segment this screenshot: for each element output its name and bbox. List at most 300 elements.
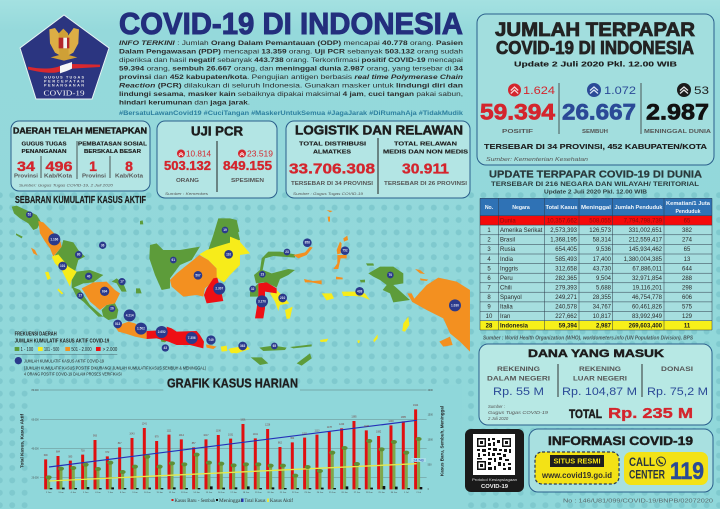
table: negara terpapar: 4 xyxy=(487,257,491,263)
map: case bubbles: 70 xyxy=(389,273,392,277)
left axis: 80.000 xyxy=(32,390,39,392)
map: case bubbles: 23 xyxy=(285,250,289,254)
chart legend: Total Kasus xyxy=(244,499,266,504)
table: negara terpapar: 585,493 xyxy=(555,257,578,263)
panel: uji pcr: ORANG xyxy=(176,178,199,184)
table source: Sumber : World Health Organization (WHO), worldometers.info (UN Population Division), BPS xyxy=(483,336,693,342)
date labels xyxy=(46,492,421,494)
map: case bubbles: 110 xyxy=(226,252,231,256)
panel: dana yang masuk xyxy=(479,344,712,425)
panel: dana yang masuk: REKENING xyxy=(497,367,540,373)
panel: daerah telah menetapkan: 496 xyxy=(46,158,73,174)
table: negara terpapar: Total Kasus xyxy=(546,205,578,211)
table: negara terpapar: Jumlah Penduduk xyxy=(614,205,663,211)
table: negara terpapar: 279,393 xyxy=(555,286,578,292)
map: case bubbles: 27 xyxy=(79,294,82,298)
situs resmi: SITUS RESMI xyxy=(554,458,601,466)
text block: info terkini: INFO TERKINI : Jumlah Orang Dalam Pemantauan (ODP) mencapai 40.778 orang. Pasien xyxy=(119,40,463,47)
bar value labels xyxy=(44,405,419,458)
heading: grafik kasus harian: GRAFIK KASUS HARIAN xyxy=(167,376,298,390)
table: negara terpapar xyxy=(480,198,712,330)
table: negara terpapar: 28 xyxy=(486,324,493,330)
table: negara terpapar: Peru xyxy=(500,276,513,282)
panel: logistik dan relawan xyxy=(286,121,470,198)
bars: meninggal xyxy=(51,486,421,489)
panel: dana yang masuk: TOTAL xyxy=(569,409,602,421)
right axis: 1000 xyxy=(428,440,434,442)
table: negara terpapar: 65 xyxy=(684,218,691,224)
panel: dana yang masuk: Sumber : xyxy=(488,404,505,409)
map: case bubbles: 80 xyxy=(77,253,81,257)
table: negara terpapar: 2,573,393 xyxy=(550,228,578,234)
map: case bubbles: 7.356 xyxy=(188,336,196,340)
table: negara terpapar: Chili xyxy=(500,286,512,292)
table: negara terpapar: 10 xyxy=(486,314,493,320)
logo: Gugus Tugas pentagon xyxy=(20,15,109,99)
table: negara terpapar: 58,314 xyxy=(593,238,612,244)
heading: update terpapar dunia: TERSEBAR DI 216 NEGARA DAN WILAYAH/ TERITORIAL xyxy=(491,181,699,188)
map legend xyxy=(15,331,206,378)
recovered pills xyxy=(46,437,422,479)
panel: daerah telah menetapkan: DAERAH TELAH MENETAPKAN xyxy=(13,126,147,136)
map: case bubbles: 61 xyxy=(172,258,175,262)
bar value labels: 1178 xyxy=(327,427,333,429)
panel: jumlah terpapar: SEMBUH xyxy=(582,129,608,135)
panel: informasi covid-19 xyxy=(529,429,713,492)
panel: jumlah terpapar: 2.987 xyxy=(646,99,709,124)
date labels: 25 Jun xyxy=(329,492,336,494)
bar value labels: 1240 xyxy=(339,424,345,426)
map: case bubbles xyxy=(26,211,461,352)
heading: update terpapar dunia xyxy=(489,170,702,196)
map legend: 4 ORANG POSITIF COVID-19 DALAM PROSES VERIFIKASI xyxy=(24,372,122,378)
map: case bubbles: 210 xyxy=(280,296,286,300)
heading: update terpapar dunia: UPDATE TERPAPAR COVID-19 DI DUNIA xyxy=(489,170,702,181)
table: negara terpapar: 274 xyxy=(682,238,693,244)
panel: uji pcr: 23.519 xyxy=(247,150,274,158)
line: kasus aktif xyxy=(49,464,417,481)
map: case bubbles: 1.166 xyxy=(50,237,59,241)
table: negara terpapar: 34,767 xyxy=(593,304,612,310)
map: case bubbles: 26 xyxy=(110,307,114,311)
panel: daerah telah menetapkan: GUGUS TUGAS xyxy=(22,142,67,148)
table: negara terpapar: 7 xyxy=(487,286,491,292)
map: case bubbles: 363 xyxy=(240,344,246,348)
panel: uji pcr: SPESIMEN xyxy=(231,178,264,184)
table: negara terpapar: 60,461,826 xyxy=(632,304,663,310)
icon: sembuh naik xyxy=(587,83,601,97)
date labels: 20 Jun xyxy=(267,492,275,494)
table: negara terpapar: 312,658 xyxy=(555,266,578,272)
table: negara terpapar: 1 xyxy=(487,228,491,234)
table: negara terpapar: 2 xyxy=(487,238,491,244)
map: case bubbles: 1.030 xyxy=(451,303,459,307)
map: eastern indonesia xyxy=(230,210,470,366)
table: negara terpapar: Negara xyxy=(512,205,530,211)
panel: jumlah terpapar xyxy=(477,14,714,165)
call center 119: CALL xyxy=(629,455,655,469)
bar value labels: 993 xyxy=(93,436,98,438)
panel: daerah telah menetapkan: PENANGANAN xyxy=(22,149,67,155)
table: negara terpapar: 508,055 xyxy=(589,218,612,224)
date labels: 5 Jun xyxy=(83,492,89,494)
date labels: 13 Jun xyxy=(181,492,188,494)
panel: daerah telah menetapkan: Kab/Kota xyxy=(115,174,143,180)
panel: uji pcr: 849.155 xyxy=(223,159,272,173)
date labels: 2 Jul xyxy=(416,492,421,494)
map: case bubbles: 32 xyxy=(251,287,255,291)
date labels: 7 Jun xyxy=(108,492,114,494)
table: negara terpapar: 10,357,662 xyxy=(547,218,578,224)
panel: logistik dan relawan: 30.911 xyxy=(402,160,449,178)
panel: jumlah terpapar: Sumber: Kementerian Kesehatan xyxy=(486,157,588,163)
table: negara terpapar: 575 xyxy=(682,304,693,310)
table: negara terpapar: 5,688 xyxy=(596,286,612,292)
bar value labels: 672 xyxy=(105,452,110,454)
right axis: 500 xyxy=(428,464,432,466)
date labels: 14 Jun xyxy=(193,492,201,494)
bars: kasus baru xyxy=(46,409,416,489)
map: case bubbles: 65 xyxy=(273,344,276,348)
date labels: 22 Jun xyxy=(292,492,299,494)
table: negara terpapar: 59,394 xyxy=(559,324,578,330)
bar value labels: 703 xyxy=(81,450,85,452)
map: case bubbles: 694 xyxy=(102,289,108,293)
table: negara terpapar: Inggris xyxy=(500,266,518,272)
table: negara terpapar: 83,992,949 xyxy=(632,314,663,320)
bar value labels: 1043 xyxy=(129,434,135,436)
table: negara terpapar: 1,368,195 xyxy=(550,238,578,244)
panel: logistik dan relawan: TOTAL RELAWAN xyxy=(394,141,457,147)
panel: informasi covid-19: INFORMASI COVID-19 xyxy=(548,436,693,448)
date labels: 21 Jun xyxy=(280,492,287,494)
panel: daerah telah menetapkan: BERSKALA BESAR xyxy=(84,149,141,155)
panel: logistik dan relawan: TERSEBAR DI 34 PROVINSI xyxy=(291,181,374,187)
table: negara terpapar: Kematian/1 Juta xyxy=(666,201,710,207)
bar value labels: 862 xyxy=(278,443,283,445)
map: case bubbles: 1.502 xyxy=(137,327,145,331)
bar value labels: 1014 xyxy=(179,435,185,437)
left axis: 40.000 xyxy=(32,448,39,450)
table: negara terpapar: Penduduk xyxy=(675,209,701,215)
table: negara terpapar: 28,355 xyxy=(593,295,612,301)
table: negara terpapar: 11 xyxy=(684,324,691,330)
table: negara terpapar: 240,578 xyxy=(555,304,578,310)
table: negara terpapar: 5 xyxy=(487,266,491,272)
panel: daerah telah menetapkan: 34 xyxy=(17,158,35,174)
panel: jumlah terpapar: COVID-19 DI INDONESIA xyxy=(496,38,694,58)
panel: daerah telah menetapkan: Provinsi xyxy=(82,174,107,180)
icon: qr modules xyxy=(477,438,511,470)
map legend: 101 - 500 xyxy=(44,347,59,353)
table: negara terpapar: Rusia xyxy=(500,247,516,253)
map: case bubbles: 23 xyxy=(261,272,264,276)
table: negara terpapar: 269,603,400 xyxy=(629,324,663,330)
table: negara terpapar: Spanyol xyxy=(500,295,522,301)
icon: meninggal naik xyxy=(677,83,691,97)
situs resmi: www.covid19.go.id xyxy=(541,471,612,480)
table: negara terpapar: 145,934,462 xyxy=(629,247,663,253)
bar value labels: 585 xyxy=(68,456,73,458)
table: negara terpapar: 1,380,004,385 xyxy=(624,257,663,263)
panel: dana yang masuk: Gugus Tugas COVID-19 xyxy=(488,410,549,415)
map legend: 1 - 100 xyxy=(21,347,33,353)
left axis: 20.000 xyxy=(32,477,39,479)
table: negara terpapar: Italia xyxy=(500,304,513,310)
panel: dana yang masuk: Rp. 104,87 M xyxy=(562,386,637,398)
table: negara terpapar: 3 xyxy=(487,247,491,253)
table: negara terpapar: 288 xyxy=(682,276,693,282)
date labels: 27 Jun xyxy=(354,492,361,494)
map: case bubbles: 52 xyxy=(28,213,31,217)
panel: dana yang masuk: 2 Juli 2020 xyxy=(487,416,509,421)
table: negara terpapar: 249,271 xyxy=(555,295,578,301)
panel: logistik dan relawan: 33.706.308 xyxy=(289,160,375,178)
chart legend: Meninggal xyxy=(219,499,243,504)
map: case bubbles: 17 xyxy=(120,280,124,284)
bar value labels: 609 xyxy=(44,455,48,457)
bar value labels: 1331 xyxy=(240,420,246,422)
table: negara terpapar: Amerika Serikat xyxy=(500,228,543,234)
chart legend: Kasus Aktif xyxy=(270,499,293,504)
table: negara terpapar: 32,971,854 xyxy=(632,276,663,282)
call center 119: 119 xyxy=(670,458,704,485)
table: negara terpapar: Iran xyxy=(500,314,510,320)
bar value labels: 857 xyxy=(192,443,196,445)
table: negara terpapar: 606 xyxy=(682,295,693,301)
date labels: 4 Jun xyxy=(71,492,77,494)
chart legend: Kasus Baru xyxy=(174,499,197,504)
map: case bubbles: 752 xyxy=(342,249,348,253)
active total label xyxy=(411,458,426,462)
table: negara terpapar: 8 xyxy=(487,295,491,301)
map: case bubbles: 438 xyxy=(357,289,363,293)
date labels: 1 Jul xyxy=(404,492,409,494)
date labels: 12 Jun xyxy=(169,492,176,494)
table: negara terpapar: Indonesia xyxy=(500,324,529,330)
bar value labels: 1293 xyxy=(388,421,394,423)
date labels: 3 Jun xyxy=(58,492,64,494)
table: negara terpapar: 212,559,417 xyxy=(629,238,663,244)
table: negara terpapar: 2,987 xyxy=(596,324,612,330)
map legend: FREKUENSI DAERAH xyxy=(15,331,57,337)
date labels: 15 Jun xyxy=(206,492,213,494)
right axis xyxy=(428,390,434,491)
text block: info terkini: diperiksa dan hasil negatif sebanyak 443.738 orang. Terkonfirmasi positif COVID-19 mencapai xyxy=(119,57,464,64)
right axis: 2000 xyxy=(428,390,434,392)
panel: daerah telah menetapkan: Sumber: Gugus Tugas COVID-19, 2 Juli 2020 xyxy=(19,183,113,187)
right axis: 1500 xyxy=(428,415,434,417)
document number: No : 146/U81/099/COVID-19/BNPB/02072020 xyxy=(563,499,713,505)
date labels: 18 Jun xyxy=(243,492,250,494)
left axis: 60.000 xyxy=(32,419,39,421)
chart: grafik kasus harian xyxy=(20,390,445,494)
panel: dana yang masuk: LUAR NEGERI xyxy=(573,376,627,382)
date labels: 17 Jun xyxy=(230,492,238,494)
date labels: 24 Jun xyxy=(317,492,324,494)
panel: uji pcr: Sumber : Kemenkes xyxy=(165,192,208,196)
map legend: JUMLAH KUMULATIF KASUS AKTIF COVID-19 xyxy=(24,358,104,364)
map: case bubbles: 858 xyxy=(305,241,310,245)
call center 119: CENTER xyxy=(629,468,665,482)
panel: jumlah terpapar: TERSEBAR DI 34 PROVINSI, 452 KABUPATEN/KOTA xyxy=(484,144,707,151)
map legend: 501 - 2.000 xyxy=(71,347,92,353)
date labels: 9 Jun xyxy=(132,492,138,494)
date labels: 8 Jun xyxy=(120,492,126,494)
table: negara terpapar: 298 xyxy=(682,286,693,292)
table: negara terpapar: 6 xyxy=(487,276,491,282)
panel: uji pcr: UJI PCR xyxy=(191,124,243,138)
date labels: 28 Jun xyxy=(366,492,373,494)
map legend: (JUMLAH KUMULATIF KASUS POSITIF DIKURANGI JUMLAH KUMULATIF KASUS SEMBUH & MENINGGAL) xyxy=(24,365,206,371)
logo: Gugus Tugas pentagon: PERCEPATAN xyxy=(44,80,84,84)
panel: daerah telah menetapkan: 1 xyxy=(89,158,97,174)
chart legend: - Sembuh xyxy=(198,499,216,504)
panel: jumlah terpapar: 26.667 xyxy=(562,99,636,124)
panel: jumlah terpapar: 59.394 xyxy=(480,99,556,124)
chart: grafik kasus harian: Total Kasus, Kasus Aktif xyxy=(20,413,25,468)
panel: dana yang masuk: REKENING xyxy=(579,367,621,373)
call center 119 xyxy=(624,452,708,485)
map: case bubbles: 19 xyxy=(223,228,227,232)
right axis: 0 xyxy=(428,489,430,491)
bar value labels: 1051 xyxy=(302,433,308,435)
panel: daerah telah menetapkan: Kab/Kota xyxy=(44,174,72,180)
panel: uji pcr xyxy=(157,121,277,198)
panel: jumlah terpapar: Update 2 Juli 2020 Pkl. 12.00 WIB xyxy=(514,62,677,68)
table: negara terpapar: Brasil xyxy=(500,238,515,244)
text block: info terkini: 59.394 orang, sembuh 26.667 orang, dan meninggal dunia 2.987 orang, yang tersebar di 34 xyxy=(119,65,463,72)
date labels: 30 Jun xyxy=(391,492,398,494)
map: case bubbles: 4.214 xyxy=(126,313,134,317)
panel: logistik dan relawan: MEDIS DAN NON MEDIS xyxy=(383,149,468,155)
logo: Gugus Tugas pentagon: PENANGANAN xyxy=(44,84,84,88)
table: negara terpapar: 17,400 xyxy=(593,257,612,263)
panel: daerah telah menetapkan xyxy=(11,121,150,191)
bar value labels: 684 xyxy=(56,452,61,454)
hashtags: #BersatuLawanCovid19 #CuciTangan #MaskerUntukSemua #JagaJarak #DiRumahAja #TidakMudik xyxy=(119,111,464,117)
table: negara terpapar: Meninggal xyxy=(581,205,612,211)
bar value labels: 954 xyxy=(290,438,295,440)
map: case bubbles: 36 xyxy=(101,243,105,247)
bar value labels: 1113 xyxy=(315,430,320,432)
map: case bubbles: 101 xyxy=(60,264,66,268)
bars: sembuh xyxy=(49,439,419,489)
panel: logistik dan relawan: LOGISTIK DAN RELAWAN xyxy=(295,124,463,138)
text block: info terkini: Dalam Pengawasan (PDP) mencapai 13.359 orang. Uji PCR sebanyak 503.132 orang sudah xyxy=(119,48,463,55)
panel: dana yang masuk: DONASI xyxy=(661,367,693,373)
bar value labels: 1241 xyxy=(142,424,148,426)
table: negara terpapar: 65 xyxy=(684,247,691,253)
map: case bubbles: 2.652 xyxy=(158,330,166,334)
bar value labels: 1385 xyxy=(351,417,357,419)
text block: info terkini: hindari kerumunan dan jaga jarak . xyxy=(119,100,250,107)
bar value labels: 1198 xyxy=(364,426,370,428)
panel: dana yang masuk: DALAM NEGERI xyxy=(487,376,550,382)
panel: jumlah terpapar: 53 xyxy=(694,85,709,97)
bar value labels: 1624 xyxy=(413,405,419,407)
table: negara terpapar: 13 xyxy=(684,257,691,263)
table: negara terpapar: 227,662 xyxy=(555,314,578,320)
table: negara terpapar: 644 xyxy=(682,266,693,272)
bar value labels: 1111 xyxy=(167,430,172,432)
map: case bubbles: 513 xyxy=(115,322,121,326)
table: negara terpapar: 9 xyxy=(487,304,491,310)
bar value labels: 1106 xyxy=(216,431,222,433)
date labels: 16 Jun xyxy=(218,492,225,494)
date labels: 19 Jun xyxy=(255,492,262,494)
table: negara terpapar: 129 xyxy=(682,314,693,320)
panel: uji pcr: 10.814 xyxy=(186,150,212,158)
panel: dana yang masuk: Rp. 55 M xyxy=(493,386,544,398)
panel: logistik dan relawan: ALMATKES xyxy=(313,149,351,155)
date labels: 10 Jun xyxy=(144,492,151,494)
table: negara terpapar: 7,794,798,739 xyxy=(624,218,663,224)
heading: update terpapar dunia: Update 2 Juli 2020 Pkl. 12.00 WIB xyxy=(544,190,647,196)
bar value labels: 1082 xyxy=(376,432,382,434)
panel: dana yang masuk: Rp. 75,2 M xyxy=(647,386,708,398)
situs resmi xyxy=(535,452,619,484)
map: case bubbles: 749 xyxy=(208,338,214,342)
bar value labels: 1226 xyxy=(265,425,271,427)
date labels: 23 Jun xyxy=(304,492,312,494)
table: negara terpapar: 10,817 xyxy=(593,314,612,320)
bar value labels: 1385 xyxy=(401,417,407,419)
qr code panel: Protokol Kesiapsiagaan xyxy=(472,478,517,482)
bar value labels: 979 xyxy=(155,437,159,439)
date labels: 26 Jun xyxy=(341,492,349,494)
active total label: 24.740 xyxy=(414,458,424,462)
icon: positif naik xyxy=(508,84,521,96)
panel: daerah telah menetapkan: PEMBATASAN SOSIAL xyxy=(78,142,148,148)
bar value labels: 1017 xyxy=(203,435,209,437)
map legend: JUMLAH KUMULATIF KASUS AKTIF COVID-19 xyxy=(15,339,109,345)
chart: grafik kasus harian: Kasus Baru, Sembuh, Meninggal xyxy=(440,406,445,476)
table: negara terpapar: 19,116,201 xyxy=(632,286,663,292)
date labels: 29 Jun xyxy=(378,492,386,494)
table: negara terpapar: 46,754,778 xyxy=(632,295,663,301)
panel: logistik dan relawan: TOTAL DISTRIBUSI xyxy=(299,141,367,147)
date labels: 2 Jun xyxy=(46,492,52,494)
table: negara terpapar: 382 xyxy=(682,228,693,234)
logo: Gugus Tugas pentagon: COVID-19 xyxy=(44,88,85,98)
table: negara terpapar: Dunia xyxy=(500,218,516,224)
panel: jumlah terpapar: MENINGGAL DUNIA xyxy=(644,129,711,135)
qr code panel: COVID-19 xyxy=(481,484,508,490)
map: western indonesia xyxy=(12,206,240,353)
table: negara terpapar: 43,730 xyxy=(593,266,612,272)
panel: jumlah terpapar: POSITIF xyxy=(502,129,534,135)
bar value labels: 1031 xyxy=(228,434,234,436)
table: negara terpapar: No. xyxy=(485,205,494,211)
panel: jumlah terpapar: JUMLAH TERPAPAR xyxy=(495,19,695,41)
date labels: 6 Jun xyxy=(95,492,101,494)
panel: dana yang masuk: DANA YANG MASUK xyxy=(528,348,664,360)
table: negara terpapar: 67,886,011 xyxy=(632,266,663,272)
panel: logistik dan relawan: Sumber : Gugus Tugas COVID-19 xyxy=(293,192,363,196)
left axis xyxy=(32,390,39,479)
text block: info terkini: lindungi sesama , masker kain sebaiknya dipakai maksimal 4 jam , cuci tangan pakai sabun, xyxy=(119,91,463,98)
chart legend xyxy=(172,498,293,504)
date labels: 11 Jun xyxy=(156,492,164,494)
panel: daerah telah menetapkan: 8 xyxy=(125,158,133,174)
map: case bubbles: 3.270 xyxy=(258,299,266,303)
map: case bubbles: 2.307 xyxy=(215,287,224,291)
map: case bubbles: 40 xyxy=(87,274,91,278)
heading: sebaran kumulatif: SEBARAN KUMULATIF KASUS AKTIF xyxy=(15,195,146,206)
map legend: > 2.000 xyxy=(103,347,117,353)
panel: logistik dan relawan: TERSEBAR DI 26 PROVINSI xyxy=(384,181,468,187)
